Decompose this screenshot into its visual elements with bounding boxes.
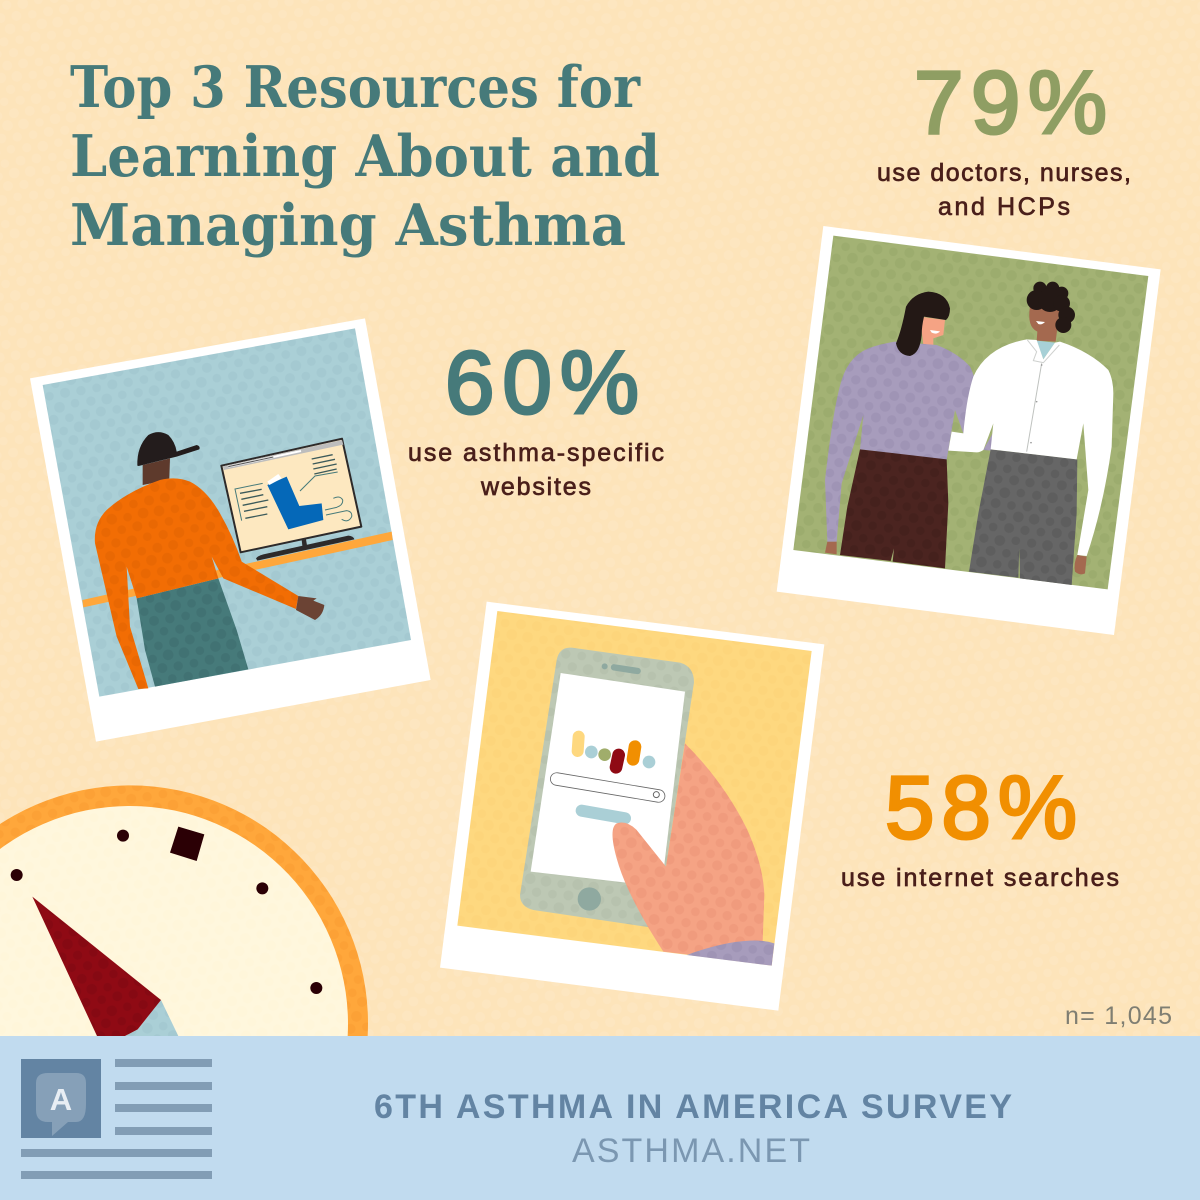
figure: man in orange sweater: [95, 432, 324, 689]
stat: 60% asthma-specific websites: use asthma-specific: [408, 439, 664, 467]
title: Learning About and: [70, 123, 660, 190]
stat: 58% internet searches: use internet searches: [841, 864, 1119, 892]
title: Top 3 Resources for: [70, 54, 641, 121]
stat: 58% internet searches: 58%: [885, 757, 1077, 857]
logo icon: [21, 1059, 212, 1179]
photo: two people with doctor: [777, 226, 1161, 635]
icon: monitor: [221, 439, 361, 561]
title: Managing Asthma: [70, 192, 626, 259]
footer title: 6TH ASTHMA IN AMERICA SURVEY: [374, 1088, 1012, 1126]
stat: 79% doctors, nurses, HCPs: [877, 52, 1131, 221]
photo: hand holding phone: [440, 602, 824, 1011]
icon: hand: [612, 743, 774, 966]
stat: 60% asthma-specific websites: websites: [480, 473, 591, 501]
stat: 79% doctors, nurses, HCPs: and HCPs: [938, 193, 1070, 221]
stat: 79% doctors, nurses, HCPs: 79%: [914, 52, 1107, 152]
stat: 58% internet searches: [841, 757, 1119, 892]
stat: 79% doctors, nurses, HCPs: use doctors, nurses,: [877, 159, 1131, 187]
illustration: clock: [0, 785, 368, 1036]
figure: woman in purple sweater: [825, 292, 993, 568]
stat: 60% asthma-specific websites: [408, 332, 664, 501]
stat: 60% asthma-specific websites: 60%: [445, 332, 639, 432]
title: [70, 54, 660, 259]
figure: man in white shirt: [948, 282, 1113, 585]
sample size note: n= 1,045: [1065, 1002, 1172, 1030]
footer band: [0, 1036, 1200, 1200]
photo: man at computer: [30, 318, 431, 742]
icon: smartphone with search page: [520, 648, 694, 928]
footer url: ASTHMA.NET: [572, 1132, 810, 1170]
logo icon: A: [50, 1082, 72, 1117]
